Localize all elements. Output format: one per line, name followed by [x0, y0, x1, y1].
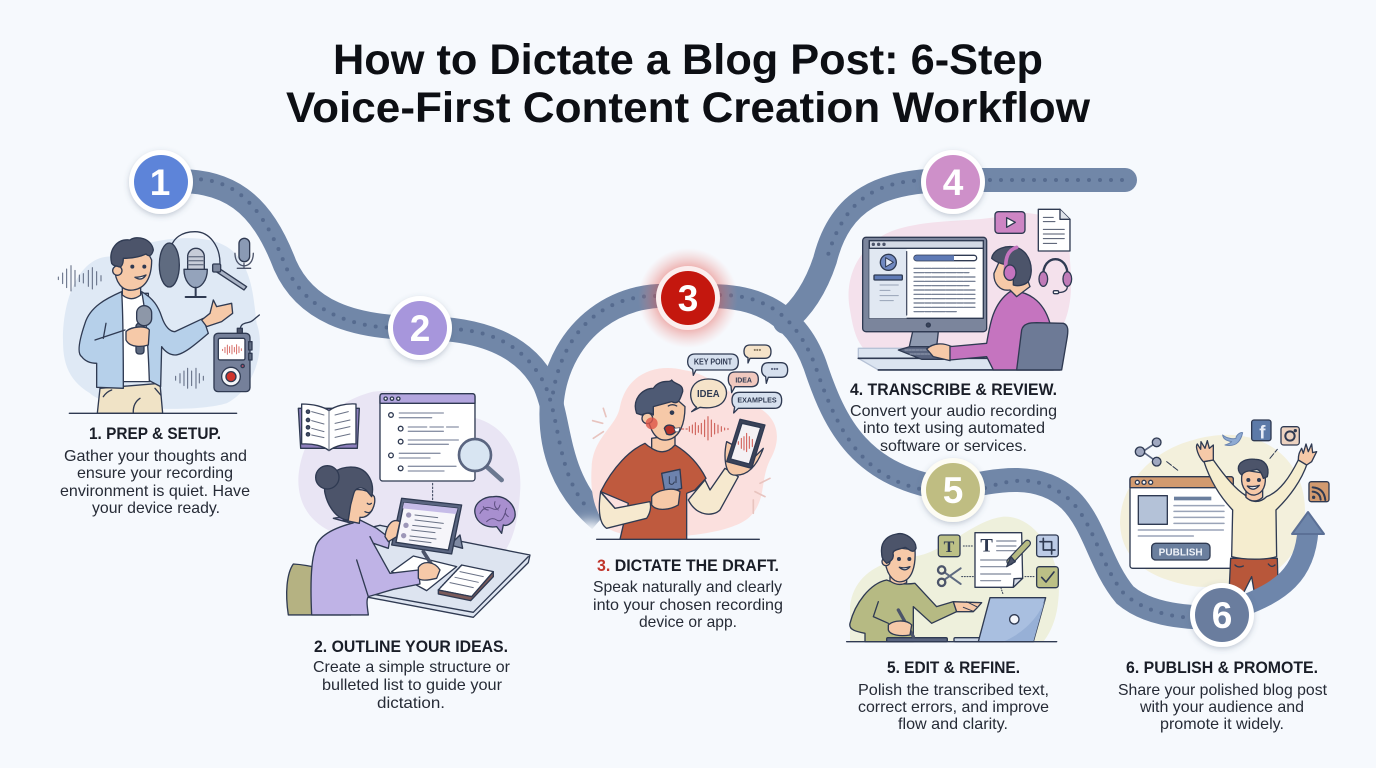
step 4 heading: 4. TRANSCRIBE & REVIEW. [850, 381, 1057, 399]
step 2 description [313, 659, 511, 712]
panel: step 6 publish and promote [1118, 420, 1329, 733]
illustration: person reviewing a transcript at a monitor [849, 209, 1072, 370]
illustration: man dictating into a phone: ••• [753, 346, 762, 355]
badge 3 highlighted: 3 [678, 278, 698, 319]
illustration: man dictating into a phone [591, 345, 788, 539]
title: Voice-First Content Creation Workflow [286, 84, 1091, 132]
panel: step 1 prep and setup [58, 232, 260, 517]
illustration: man dictating into a phone: EXAMPLES [737, 396, 777, 405]
step 1 description: environment is quiet. Have [60, 483, 250, 500]
step 6 description [1118, 682, 1328, 733]
step 2 description: bulleted list to guide your [322, 677, 503, 694]
badge 2: 2 [410, 308, 430, 349]
title: How to Dictate a Blog Post: 6-Step [333, 36, 1043, 84]
step 1 heading: 1. PREP & SETUP. [89, 425, 221, 443]
step 5 heading: 5. EDIT & REFINE. [887, 659, 1020, 677]
step 5 description: flow and clarity. [898, 716, 1008, 733]
step 5 description [858, 682, 1049, 733]
step 4 description: software or services. [880, 438, 1027, 455]
illustration: person editing a document on a laptop: T [944, 539, 955, 556]
illustration: person editing a document on a laptop [847, 517, 1059, 642]
badge 3 highlighted [638, 248, 738, 348]
step 2 description: dictation. [377, 695, 445, 712]
illustration: speaker with microphone and recorder [58, 232, 260, 413]
step 6 description: with your audience and [1139, 699, 1304, 716]
step 5 description: Polish the transcribed text, [858, 682, 1049, 699]
step 6 heading: 6. PUBLISH & PROMOTE. [1126, 659, 1318, 677]
step number badges [129, 150, 1254, 647]
step 3 heading: 3. DICTATE THE DRAFT. [597, 557, 779, 575]
badge 6 [1190, 583, 1254, 647]
step 5 description: correct errors, and improve [858, 699, 1049, 716]
step 4 description [850, 403, 1057, 455]
illustration: person celebrating a published post: PUBLISH [1159, 547, 1203, 558]
illustration: person celebrating a published post: f [1259, 421, 1266, 442]
road fade behind step 3 [568, 521, 612, 549]
panel: step 3 dictate the draft [591, 345, 788, 631]
badge 4: 4 [943, 162, 964, 203]
badge 2 [388, 296, 452, 360]
badge 1: 1 [150, 162, 170, 203]
step 1 description: your device ready. [92, 500, 220, 517]
panel: step 2 outline your ideas [287, 391, 530, 712]
illustration: man dictating into a phone: KEY POINT [694, 358, 732, 367]
arrow: upward finish arrow [1240, 512, 1324, 607]
winding road path [160, 179, 1222, 618]
step 2 heading: 2. OUTLINE YOUR IDEAS. [314, 638, 508, 656]
step 1 description: Gather your thoughts and [64, 448, 247, 465]
illustration: man dictating into a phone: IDEA [735, 375, 752, 384]
step 2 description: Create a simple structure or [313, 659, 511, 676]
illustration: woman outlining on a tablet [287, 391, 530, 617]
step 1 description: ensure your recording [77, 465, 233, 482]
panel: step 4 transcribe and review [849, 209, 1072, 455]
step 1 description [60, 448, 250, 517]
badge 5 [921, 458, 985, 522]
step 3 description [593, 579, 783, 631]
step 3 description: device or app. [639, 614, 737, 631]
step 4 description: Convert your audio recording [850, 403, 1057, 420]
badge 5: 5 [943, 470, 963, 511]
step 4 description: into text using automated [863, 420, 1045, 437]
step 6 description: Share your polished blog post [1118, 682, 1328, 699]
panel: step 5 edit and refine [847, 517, 1059, 733]
step 6 description: promote it widely. [1160, 716, 1284, 733]
badge 6: 6 [1212, 595, 1232, 636]
title [286, 36, 1091, 132]
badge 4 [921, 150, 985, 214]
step 3 description: Speak naturally and clearly [593, 579, 782, 596]
illustration: person celebrating a published post [1120, 420, 1329, 597]
illustration: person editing a document on a laptop: T [980, 536, 993, 557]
badge 1 [129, 150, 193, 214]
illustration: man dictating into a phone: ••• [771, 364, 779, 373]
illustration: man dictating into a phone: IDEA [697, 389, 720, 400]
step 3 description: into your chosen recording [593, 597, 783, 614]
